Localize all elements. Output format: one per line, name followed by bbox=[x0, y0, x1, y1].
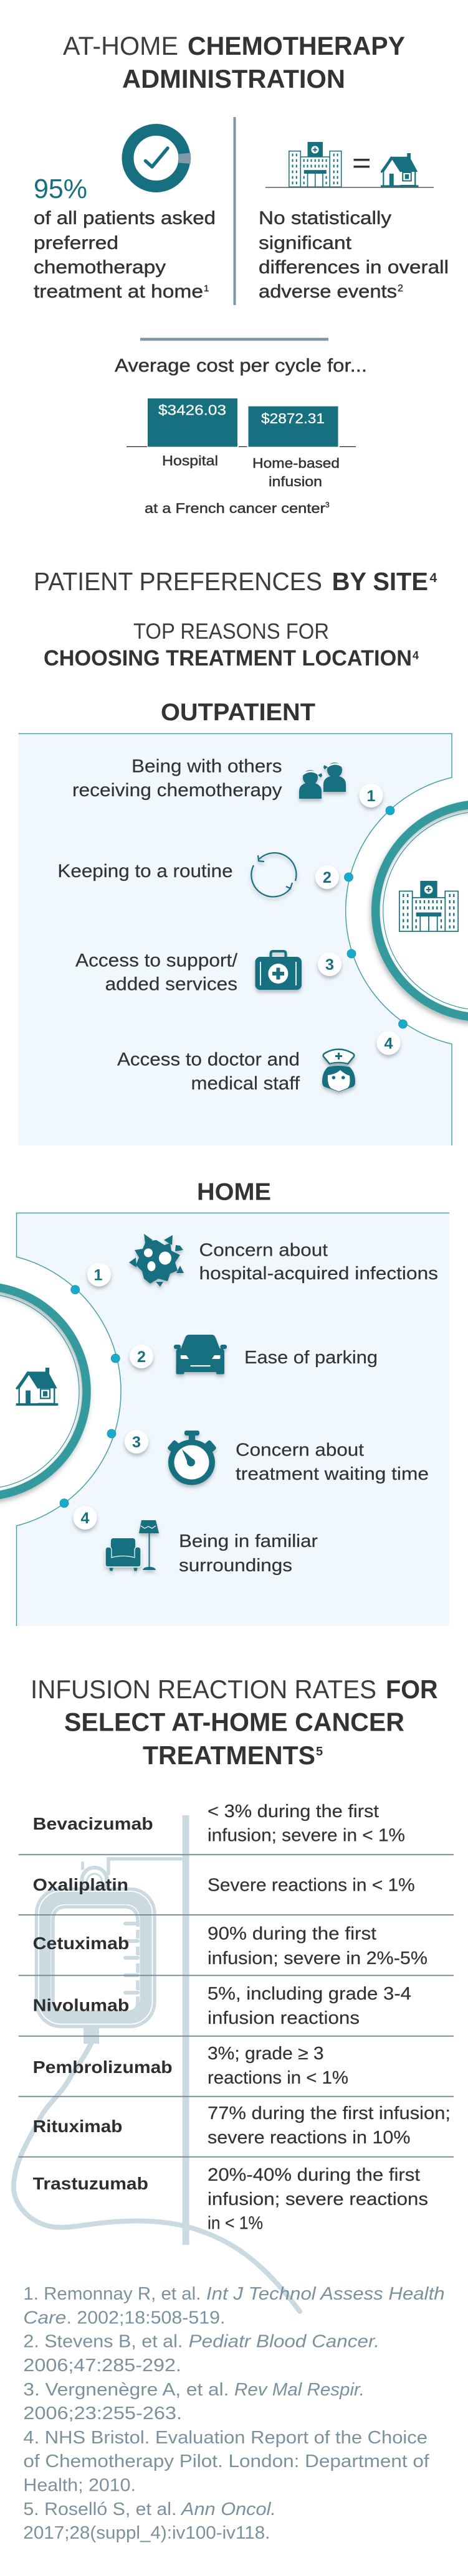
illustration: iv bag, pole and tube bbox=[14, 1815, 300, 2311]
bar chart: cost per cycle: Home-based bbox=[252, 456, 340, 471]
title: at-home chemotherapy administration bbox=[63, 31, 405, 93]
reason 3 text bbox=[236, 1441, 429, 1484]
heading: patient preferences by site: PATIENT PREFERENCES bbox=[34, 567, 322, 596]
stat: 95 percent prefer home: 95% bbox=[34, 174, 87, 204]
row: pembrolizumab: 3%; grade ≥ 3 bbox=[208, 2044, 324, 2064]
bar chart: cost per cycle: Hospital bbox=[162, 453, 218, 469]
reason 3 text: Concern about bbox=[236, 1441, 364, 1460]
icon: house bbox=[16, 1368, 58, 1406]
row: nivolumab: infusion reactions bbox=[208, 2008, 360, 2028]
references: 3. Vergnenègre A, et al. bbox=[23, 2380, 229, 2400]
heading: top reasons for choosing treatment location bbox=[44, 619, 419, 670]
references: Rev Mal Respir. bbox=[234, 2380, 365, 2400]
references: Health; 2010. bbox=[23, 2476, 136, 2496]
reason 1 text: hospital-acquired infections bbox=[199, 1264, 438, 1284]
heading: top reasons for choosing treatment location: TOP REASONS FOR bbox=[133, 619, 329, 644]
horizontal divider bbox=[140, 338, 328, 341]
text: no significant differences: significant bbox=[259, 233, 352, 253]
row: oxaliplatin: Severe reactions in < 1% bbox=[208, 1876, 415, 1896]
heading: outpatient: OUTPATIENT bbox=[161, 699, 315, 726]
heading: infusion reaction rates: 5 bbox=[316, 1745, 323, 1759]
icon: stopwatch bbox=[167, 1431, 217, 1485]
text: no significant differences: 2 bbox=[398, 283, 403, 294]
bar chart: cost per cycle: infusion bbox=[269, 474, 322, 489]
reason 3 text: Access to support/ bbox=[75, 951, 238, 971]
references: Ann Oncol. bbox=[180, 2499, 276, 2519]
references: . 2002;18:508-519. bbox=[66, 2308, 226, 2328]
icon: germ bbox=[129, 1234, 184, 1287]
row: rituximab: 77% during the first infusion; bbox=[208, 2104, 451, 2123]
reason 1 text bbox=[199, 1240, 438, 1284]
row: trastuzumab: in < 1% bbox=[208, 2214, 263, 2234]
references: 2006;47:285-292. bbox=[23, 2356, 181, 2376]
row: bevacizumab: Bevacizumab bbox=[33, 1814, 153, 1833]
row: cetuximab bbox=[33, 1924, 427, 1968]
heading: home: HOME bbox=[197, 1179, 271, 1206]
row: trastuzumab: infusion; severe reactions bbox=[208, 2189, 428, 2209]
timeline dots bbox=[60, 1286, 120, 1508]
stat: 95 percent prefer home: preferred bbox=[34, 233, 118, 253]
reason 4 text: Access to doctor and bbox=[117, 1050, 300, 1070]
row: oxaliplatin: Oxaliplatin bbox=[33, 1875, 128, 1894]
row: bevacizumab bbox=[33, 1802, 405, 1846]
heading: patient preferences by site: BY SITE bbox=[332, 567, 428, 596]
table: infusion reaction rates bbox=[19, 1802, 454, 2234]
text: no significant differences bbox=[259, 208, 449, 302]
row: cetuximab: 90% during the first bbox=[208, 1924, 376, 1944]
number badges: 4 bbox=[384, 1035, 393, 1052]
reason 3 text: added services bbox=[105, 974, 237, 995]
icon: hospital bbox=[399, 881, 458, 931]
reason 4 text bbox=[179, 1531, 318, 1576]
number badges: 1 bbox=[367, 787, 376, 805]
icon: nurse bbox=[322, 1050, 355, 1092]
row: nivolumab bbox=[33, 1984, 411, 2028]
row: rituximab: severe reactions in 10% bbox=[208, 2128, 410, 2148]
bar chart: cost per cycle: $3426.03 bbox=[158, 402, 226, 418]
row: bevacizumab: infusion; severe in < 1% bbox=[208, 1826, 405, 1846]
heading: infusion reaction rates: SELECT AT-HOME CANCER bbox=[64, 1708, 404, 1737]
number badges: 3 bbox=[132, 1434, 141, 1451]
references: Care bbox=[23, 2308, 66, 2328]
reason 2 text: Keeping to a routine bbox=[57, 861, 233, 881]
reason 1 text bbox=[72, 756, 282, 801]
references: 2006;23:255-263. bbox=[23, 2404, 182, 2423]
row: trastuzumab: 20%-40% during the first bbox=[208, 2165, 420, 2185]
reason 3 text bbox=[75, 951, 238, 995]
heading: top reasons for choosing treatment location: CHOOSING TREATMENT LOCATION bbox=[44, 646, 412, 670]
reason 1 text: Concern about bbox=[199, 1240, 328, 1260]
row: nivolumab: Nivolumab bbox=[33, 1996, 129, 2015]
reason 4 text bbox=[117, 1050, 300, 1094]
title: at-home chemotherapy administration: CHEMOTHERAPY bbox=[188, 31, 405, 60]
references: 1. Remonnay R, et al. bbox=[23, 2284, 201, 2304]
icon: car bbox=[174, 1335, 227, 1375]
reason 1 text: Being with others bbox=[131, 756, 282, 777]
heading: infusion reaction rates bbox=[31, 1675, 438, 1770]
heading: average cost per cycle: Average cost per cycle for... bbox=[115, 355, 367, 376]
row: rituximab: Rituximab bbox=[33, 2117, 122, 2136]
heading: top reasons for choosing treatment location: 4 bbox=[413, 649, 419, 662]
row: oxaliplatin bbox=[33, 1875, 415, 1896]
number badges bbox=[74, 1262, 153, 1530]
title: at-home chemotherapy administration: AT-HOME bbox=[63, 31, 178, 60]
stat: 95 percent prefer home: chemotherapy bbox=[34, 257, 166, 278]
caption: at a french cancer center: 3 bbox=[325, 501, 330, 509]
reason 4 text: Being in familiar bbox=[179, 1531, 318, 1551]
text: no significant differences: differences in overall bbox=[259, 257, 449, 278]
reason 2 text: Ease of parking bbox=[244, 1348, 378, 1368]
row: nivolumab: 5%, including grade 3-4 bbox=[208, 1984, 411, 2004]
references: Int J Technol Assess Health bbox=[206, 2284, 445, 2304]
stat: 95 percent prefer home: treatment at home bbox=[34, 281, 203, 302]
heading: infusion reaction rates: INFUSION REACTION RATES bbox=[31, 1675, 376, 1704]
text: no significant differences: No statistically bbox=[259, 208, 391, 228]
icon: two patients with head scarves bbox=[299, 763, 346, 799]
heading: infusion reaction rates: FOR bbox=[386, 1675, 438, 1704]
row: cetuximab: infusion; severe in 2%-5% bbox=[208, 1948, 427, 1968]
title: at-home chemotherapy administration: ADMINISTRATION bbox=[122, 64, 345, 93]
row: bevacizumab: < 3% during the first bbox=[208, 1802, 379, 1822]
timeline dots bbox=[344, 806, 408, 1028]
references: Pediatr Blood Cancer. bbox=[189, 2332, 380, 2352]
number badges bbox=[315, 784, 400, 1055]
icon: first aid kit bbox=[255, 951, 302, 990]
references: 4. NHS Bristol. Evaluation Report of the Choice bbox=[23, 2428, 427, 2448]
heading: patient preferences by site: 4 bbox=[430, 571, 437, 585]
bar chart: cost per cycle: $2872.31 bbox=[261, 410, 325, 426]
references bbox=[23, 2284, 445, 2543]
number badges: 3 bbox=[325, 956, 334, 974]
stat: 95 percent prefer home: of all patients asked bbox=[34, 208, 216, 228]
reason 1 text: receiving chemotherapy bbox=[72, 780, 282, 801]
reason 4 text: surroundings bbox=[179, 1556, 292, 1576]
number badges: 2 bbox=[323, 869, 332, 886]
references: 5. Roselló S, et al. bbox=[23, 2499, 176, 2519]
icon: armchair and lamp bbox=[105, 1520, 159, 1571]
row: pembrolizumab: reactions in < 1% bbox=[208, 2068, 348, 2088]
icon: routine cycle arrows bbox=[251, 853, 296, 897]
panel: outpatient reasons bbox=[19, 733, 468, 1145]
text: no significant differences: adverse events bbox=[259, 281, 397, 302]
heading: infusion reaction rates: TREATMENTS bbox=[143, 1741, 315, 1770]
reason 3 text: treatment waiting time bbox=[236, 1464, 429, 1484]
number badges: 1 bbox=[94, 1266, 103, 1284]
icon: 95 percent ring with check mark bbox=[128, 129, 191, 187]
row: trastuzumab bbox=[33, 2165, 428, 2234]
stat: 95 percent prefer home: 1 bbox=[204, 283, 209, 294]
vertical divider bbox=[233, 117, 236, 305]
references: 2. Stevens B, et al. bbox=[23, 2332, 183, 2352]
row: rituximab bbox=[33, 2104, 451, 2148]
number badges: 4 bbox=[81, 1510, 90, 1527]
references: of Chemotherapy Pilot. London: Department of bbox=[23, 2451, 430, 2471]
row: pembrolizumab: Pembrolizumab bbox=[33, 2057, 173, 2077]
row: trastuzumab: Trastuzumab bbox=[33, 2174, 148, 2193]
panel: home reasons bbox=[0, 1213, 449, 1626]
number badges: 2 bbox=[137, 1348, 146, 1366]
row: pembrolizumab bbox=[33, 2044, 348, 2088]
row: cetuximab: Cetuximab bbox=[33, 1934, 129, 1953]
icon: hospital equals home bbox=[265, 142, 434, 188]
reason 4 text: medical staff bbox=[191, 1073, 300, 1094]
caption: at a french cancer center: at a French cancer center bbox=[145, 501, 325, 516]
references: 2017;28(suppl_4):iv100-iv118. bbox=[23, 2523, 270, 2543]
bar chart: cost per cycle bbox=[127, 398, 356, 489]
stat: 95 percent prefer home bbox=[34, 174, 216, 302]
